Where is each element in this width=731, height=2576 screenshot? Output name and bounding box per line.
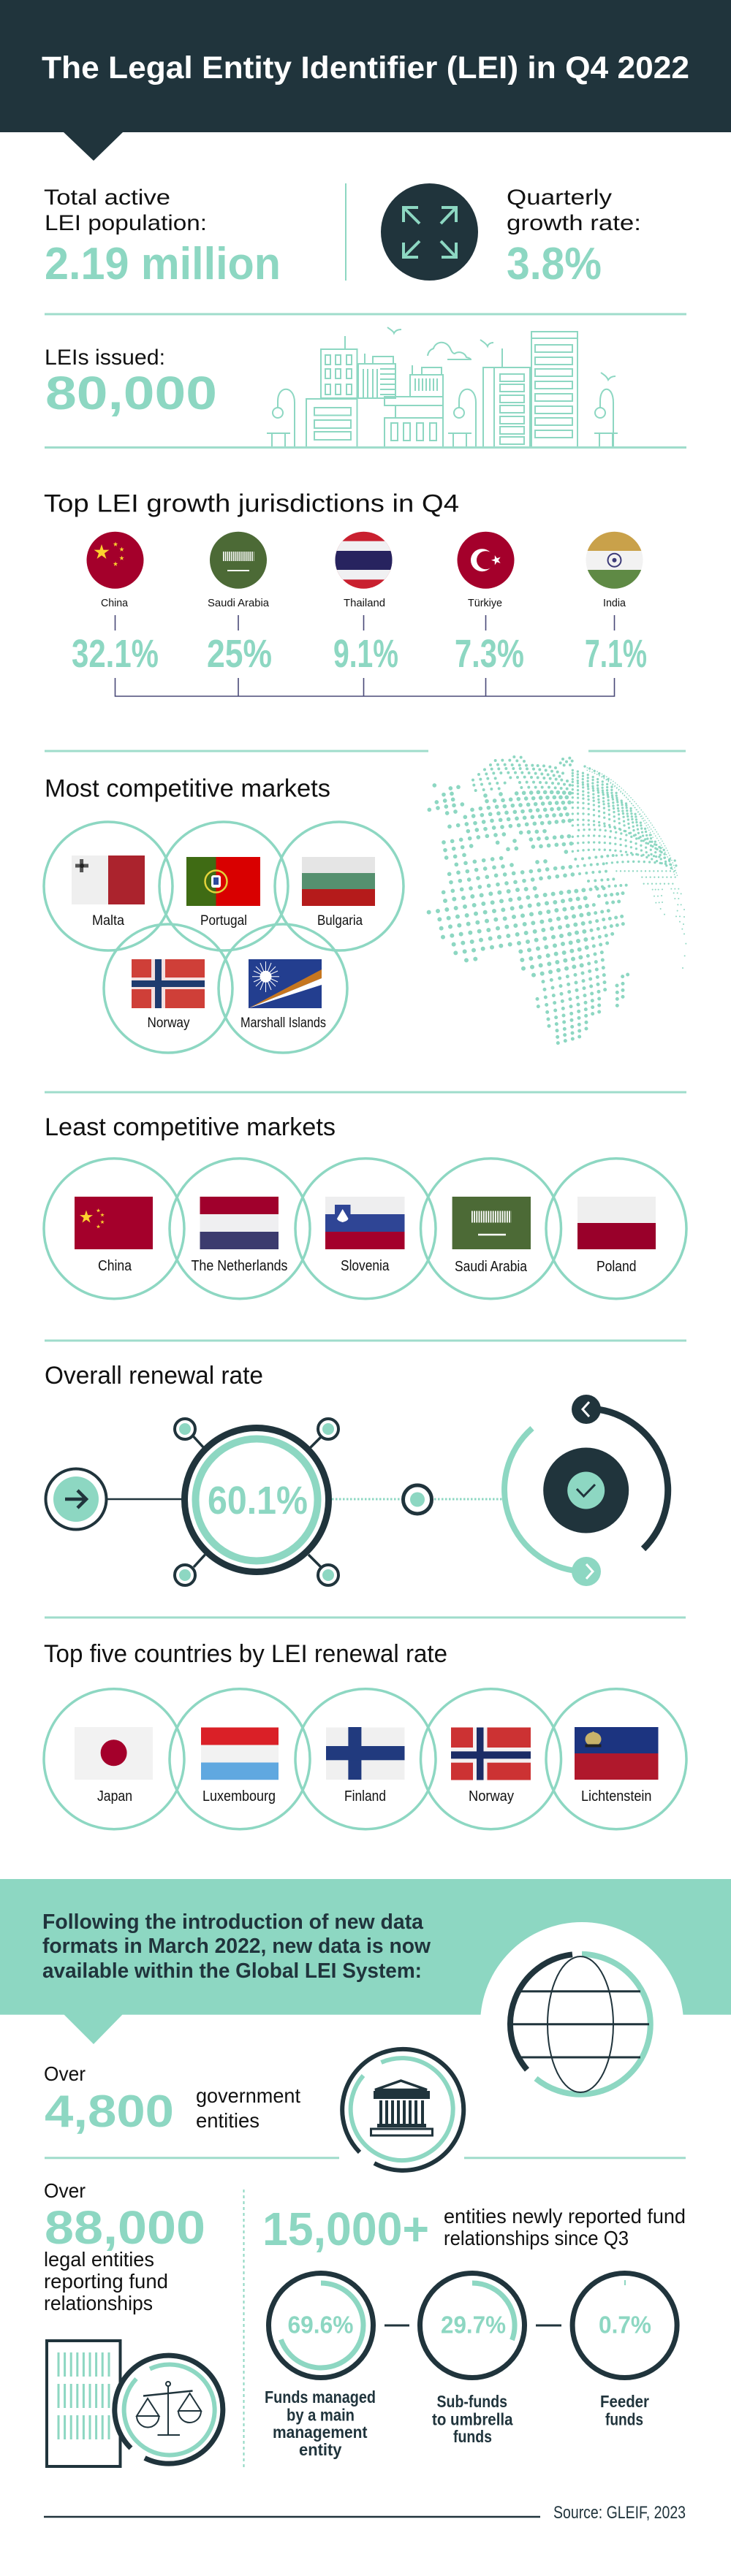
chart: 29.7% sub-funds: 29.7% — [441, 2312, 506, 2338]
chart: 29.7% sub-funds — [420, 2274, 525, 2446]
labels: countries: Malta — [92, 913, 124, 929]
stats: growth percentages: 32.1% — [72, 632, 159, 676]
icon: government building — [342, 2049, 463, 2171]
labels: countries — [101, 597, 626, 609]
header banner — [0, 0, 731, 161]
bracket connectors — [115, 615, 614, 696]
flag: Japan — [75, 1727, 153, 1780]
source footer: Source: GLEIF, 2023 — [553, 2503, 686, 2523]
flag: Saudi Arabia — [209, 531, 268, 590]
labels: countries: China — [101, 597, 129, 609]
chart: 0.7% feeder funds: funds — [605, 2409, 643, 2428]
flag: China — [75, 1197, 153, 1249]
panel: overall renewal rate — [45, 1395, 668, 1586]
panel: least competitive markets — [44, 1159, 686, 1299]
heading: top growth jurisdictions: Top LEI growth jurisdictions in Q4 — [44, 489, 459, 517]
stats: growth percentages: 25% — [207, 632, 272, 676]
panel: quarterly growth rate: growth rate: — [507, 211, 641, 235]
labels: countries: Portugal — [200, 913, 247, 929]
icon: renewal cycle check — [504, 1395, 668, 1586]
labels: countries — [92, 913, 363, 1031]
flag: India — [585, 531, 643, 590]
chart: 69.6% funds managed: Funds managed — [265, 2388, 376, 2407]
banner text: Following the introduction of new data — [42, 1910, 424, 1934]
panel: total active LEI population — [44, 186, 281, 289]
panel: 88,000 legal entities: reporting fund — [44, 2270, 168, 2293]
chart: 0.7% feeder funds: 0.7% — [599, 2312, 651, 2338]
icon: arrow node — [45, 1468, 107, 1530]
flag: Slovenia — [325, 1197, 405, 1249]
panel: government entities: government — [196, 2084, 300, 2107]
chart: 69.6% funds managed — [265, 2274, 376, 2459]
panel: total active LEI population: Total active — [44, 186, 170, 210]
chart: 0.7% feeder funds: Feeder — [600, 2392, 649, 2411]
chart: 69.6% funds managed: entity — [299, 2440, 342, 2459]
flag: Portugal — [186, 857, 260, 906]
labels: countries: Marshall Islands — [240, 1015, 326, 1031]
labels: countries: Thailand — [344, 597, 385, 609]
chart: 0.7% feeder funds — [572, 2274, 677, 2428]
panel: 15,000+ fund relationships — [262, 2203, 686, 2459]
panel: total active LEI population: LEI population: — [45, 211, 207, 235]
chart: 29.7% sub-funds: funds — [453, 2427, 492, 2446]
flag: Türkiye — [457, 531, 515, 590]
title: The Legal Entity Identifier (LEI) in Q4 2022 — [42, 50, 689, 85]
stat: 80,000: 80,000 — [45, 367, 217, 419]
icon: satellite nodes — [175, 1419, 338, 1585]
heading: most competitive markets: Most competitive markets — [45, 774, 330, 802]
panel: government entities: entities — [196, 2109, 260, 2132]
flag: Norway — [132, 959, 205, 1008]
flag: Poland — [577, 1197, 656, 1249]
icon: globe — [510, 1954, 651, 2095]
labels: countries: India — [603, 597, 626, 609]
panel: 88,000 legal entities: Over — [44, 2179, 86, 2202]
icon: office building and scales — [47, 2341, 225, 2466]
banner: new data formats — [0, 1879, 731, 2125]
rings — [44, 1689, 686, 1829]
panel: LEIs issued: LEIs issued: — [45, 346, 165, 370]
labels: countries: Finland — [344, 1788, 386, 1805]
heading: overall renewal rate: Overall renewal rate — [45, 1362, 263, 1390]
panel: government entities: Over — [44, 2062, 86, 2085]
flag: Bulgaria — [302, 857, 375, 906]
panel: most competitive markets — [44, 822, 404, 1053]
labels: countries: Bulgaria — [317, 913, 363, 929]
flag: Finland — [326, 1727, 405, 1780]
chart: 69.6% funds managed: 69.6% — [288, 2312, 354, 2338]
labels: countries: Luxembourg — [202, 1788, 276, 1805]
labels: countries: Lichtenstein — [581, 1788, 652, 1805]
flag: Thailand — [335, 531, 393, 590]
stat: 3.8%: 3.8% — [507, 239, 602, 289]
labels: countries — [97, 1788, 652, 1805]
labels: countries: Norway — [148, 1015, 190, 1031]
stats: growth percentages — [72, 632, 647, 676]
panel: 88,000 legal entities: legal entities — [44, 2248, 154, 2271]
icon: middle node — [404, 1485, 431, 1514]
flag: Norway — [451, 1727, 531, 1780]
heading: least competitive markets: Least competitive markets — [45, 1113, 336, 1141]
flag: The Netherlands — [200, 1197, 279, 1249]
flag: Luxembourg — [201, 1727, 279, 1780]
labels: countries: Poland — [596, 1259, 636, 1275]
heading: top five countries: Top five countries by LEI renewal rate — [44, 1640, 447, 1668]
stat: 4,800: 4,800 — [45, 2087, 174, 2137]
panel: top five countries by renewal rate — [44, 1689, 686, 1829]
stat: 2.19 million: 2.19 million — [45, 239, 281, 289]
panel: 15,000+ fund relationships: entities newly reported fund — [444, 2205, 686, 2228]
flag: Malta — [72, 856, 145, 904]
chart: 69.6% funds managed: management — [273, 2423, 368, 2442]
dial: 60.1% renewal — [184, 1428, 329, 1572]
banner text: available within the Global LEI System: — [42, 1959, 422, 1983]
panel: quarterly growth rate — [507, 186, 641, 289]
banner text — [42, 1910, 431, 1983]
flag: Saudi Arabia — [452, 1197, 531, 1249]
stat: 15,000+: 15,000+ — [262, 2203, 429, 2255]
flag: China — [86, 531, 145, 590]
rings — [44, 1159, 686, 1299]
labels: countries — [98, 1258, 636, 1275]
chart: 29.7% sub-funds: Sub-funds — [437, 2392, 507, 2411]
flag: Liechtenstein — [575, 1727, 658, 1780]
labels: countries: Japan — [97, 1788, 132, 1805]
stat: 88,000: 88,000 — [45, 2201, 205, 2254]
panel: LEIs issued — [45, 346, 217, 419]
banner text: formats in March 2022, new data is now — [42, 1935, 431, 1958]
panel: 15,000+ fund relationships: relationships since Q3 — [444, 2227, 629, 2249]
labels: countries: Slovenia — [341, 1258, 390, 1274]
stats: growth percentages: 9.1% — [333, 632, 398, 676]
labels: countries: China — [98, 1258, 132, 1274]
labels: countries: Norway — [469, 1788, 514, 1805]
chart: 29.7% sub-funds: to umbrella — [432, 2409, 513, 2428]
labels: countries: Saudi Arabia — [455, 1259, 528, 1275]
illustration: city skyline — [267, 327, 618, 449]
rings — [44, 822, 404, 1053]
stats: growth percentages: 7.3% — [455, 632, 524, 676]
panel: quarterly growth rate: Quarterly — [507, 186, 612, 210]
illustration: dotted globe — [429, 757, 686, 1043]
dial: 60.1% renewal: 60.1% — [208, 1479, 308, 1523]
stats: growth percentages: 7.1% — [585, 632, 647, 676]
chart: 69.6% funds managed: by a main — [287, 2405, 355, 2424]
icon: expanding arrows — [381, 183, 478, 281]
labels: countries: Saudi Arabia — [208, 597, 270, 609]
labels: countries: The Netherlands — [192, 1258, 288, 1274]
panel: 88,000 legal entities — [44, 2179, 205, 2314]
panel: government entities — [44, 2062, 300, 2137]
labels: countries: Türkiye — [468, 597, 502, 609]
panel: 88,000 legal entities: relationships — [44, 2292, 153, 2314]
flag: Marshall Islands — [249, 959, 322, 1008]
panel: top growth jurisdictions — [72, 531, 647, 696]
